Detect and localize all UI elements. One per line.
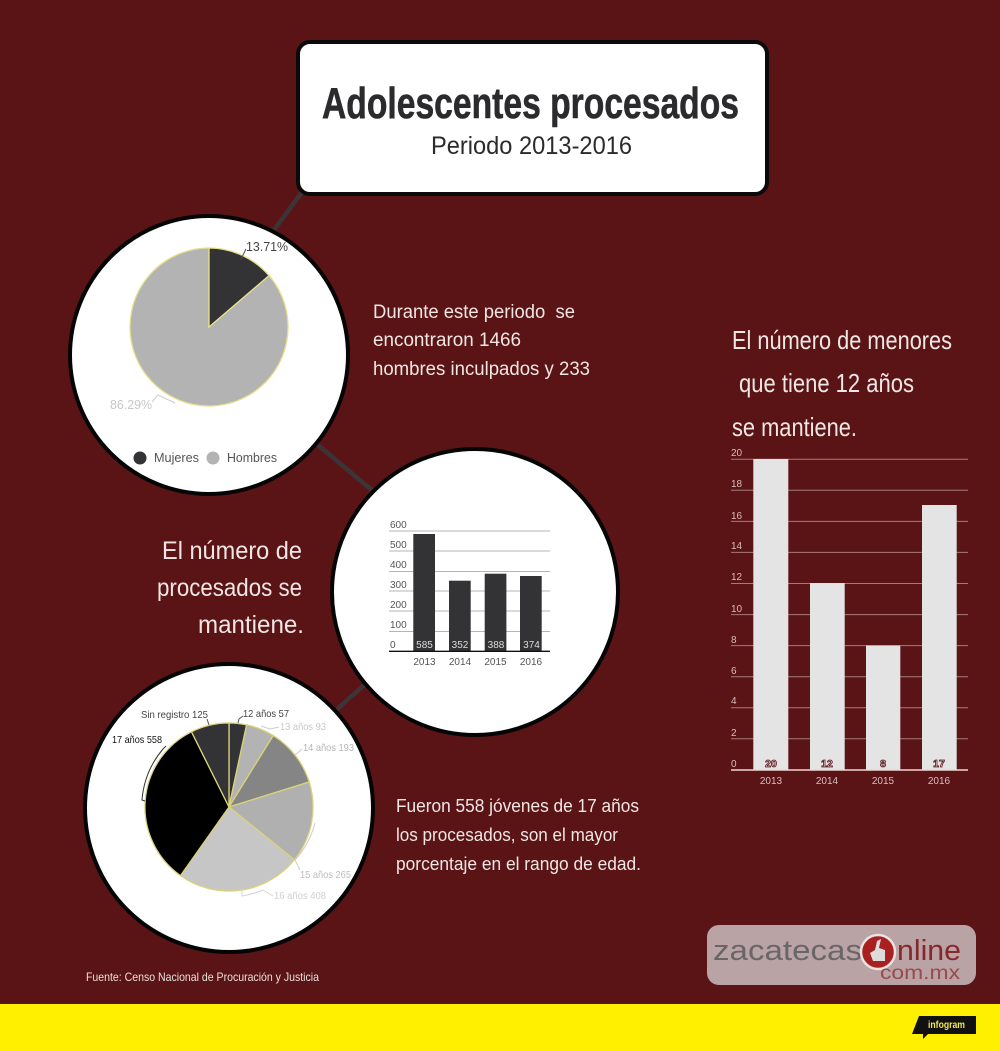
label: 16 años	[242, 889, 326, 902]
y axis labels: 400	[390, 560, 407, 571]
label: 13 años	[261, 721, 326, 733]
bars	[413, 534, 542, 651]
label: 15 años	[295, 823, 351, 881]
legend	[134, 450, 277, 465]
label: 16 años: 16 años 408	[274, 890, 326, 902]
label: 14 años: 14 años 193	[303, 742, 354, 754]
label: 86.29%: 86.29%	[110, 397, 152, 412]
bar chart: 12-year-olds	[731, 448, 968, 787]
y axis labels: 200	[390, 600, 407, 611]
label: 13 años: 13 años 93	[280, 721, 326, 733]
source note: Fuente: Censo Nacional de Procuración y Justicia	[86, 970, 319, 984]
subtitle: Periodo 2013-2016	[431, 132, 632, 160]
y axis labels: 0	[390, 640, 396, 651]
y axis labels: 12	[731, 572, 743, 583]
title box	[298, 42, 767, 194]
bar values	[765, 758, 945, 770]
legend: Mujeres	[154, 450, 199, 465]
y axis labels: 100	[390, 620, 407, 631]
heading: 12-year-olds: El número de menores	[732, 325, 952, 355]
year labels: 2014	[449, 657, 472, 668]
bar values	[416, 640, 540, 651]
year labels	[413, 657, 543, 668]
y axis labels: 600	[390, 520, 407, 531]
legend: Hombres	[227, 450, 277, 465]
bar values: 388	[488, 640, 505, 651]
year labels: 2013	[413, 657, 436, 668]
x axis	[389, 650, 550, 652]
y axis labels: 14	[731, 541, 743, 552]
label: 17 años: 17 años 558	[112, 734, 162, 746]
label: 12 años: 12 años 57	[243, 708, 289, 720]
pie slice: hombres	[130, 248, 288, 406]
y axis labels: 4	[731, 696, 737, 707]
logo: zacatecas online	[707, 925, 976, 985]
text block: processed stays the same: mantiene.	[198, 611, 304, 639]
year labels: 2015	[872, 776, 895, 787]
footer band	[0, 1004, 1000, 1051]
y axis labels: 8	[731, 635, 737, 646]
year labels: 2013	[760, 776, 783, 787]
text block: gender summary: Durante este periodo se	[373, 302, 575, 323]
y axis labels	[731, 448, 743, 770]
panel: processed per year circle	[332, 449, 618, 735]
text block: gender summary: encontraron 1466	[373, 330, 521, 351]
text block: age summary	[396, 796, 641, 874]
text block: age summary: porcentaje en el rango de edad.	[396, 854, 641, 874]
bars	[753, 459, 957, 770]
y axis labels: 2	[731, 728, 737, 739]
connector lines between circles	[274, 192, 374, 712]
pie chart by age	[145, 723, 313, 891]
panel: gender pie circle	[70, 216, 348, 494]
logo: zacatecas online: zacatecas	[713, 935, 862, 967]
icon: red circle with hand	[861, 935, 895, 969]
y axis labels: 500	[390, 540, 407, 551]
label: 13.71%: 13.71%	[246, 239, 288, 254]
text block: gender summary	[373, 302, 590, 380]
grid lines	[731, 459, 968, 739]
year labels: 2014	[816, 776, 839, 787]
text block: processed stays the same: El número de	[162, 537, 302, 565]
panel: age pie circle	[85, 664, 373, 952]
heading: 12-year-olds	[732, 325, 952, 442]
y axis labels: 6	[731, 666, 737, 677]
text block: gender summary: hombres inculpados y 233	[373, 359, 590, 380]
logo: zacatecas online: nline	[897, 935, 961, 967]
y axis labels: 300	[390, 580, 407, 591]
label: 13.71%	[241, 239, 288, 259]
text block: age summary: los procesados, son el mayor	[396, 825, 618, 845]
y axis labels: 16	[731, 511, 743, 522]
bar values: 585	[416, 640, 433, 651]
year labels	[760, 776, 951, 787]
label: 17 años	[112, 734, 166, 801]
bar values: 17	[933, 758, 945, 770]
text block: processed stays the same: procesados se	[157, 574, 302, 602]
label: 86.29%	[110, 395, 175, 412]
grid lines	[389, 531, 550, 632]
year labels: 2015	[484, 657, 507, 668]
y axis labels: 20	[731, 448, 743, 459]
title: Adolescentes procesados	[322, 79, 739, 128]
label: 12 años	[238, 708, 289, 723]
bar values: 12	[821, 758, 833, 770]
text block: age summary: Fueron 558 jóvenes de 17 años	[396, 796, 639, 816]
pie slice: mujeres	[209, 248, 269, 327]
year labels: 2016	[520, 657, 543, 668]
label: 15 años: 15 años 265	[300, 869, 351, 881]
bar values: 374	[523, 640, 540, 651]
bar values: 8	[880, 758, 886, 770]
label: Sin registro: Sin registro 125	[141, 709, 208, 721]
heading: 12-year-olds: que tiene 12 años	[739, 368, 914, 398]
x axis	[731, 769, 968, 771]
y axis labels: 18	[731, 479, 743, 490]
y axis labels	[390, 520, 407, 651]
year labels: 2016	[928, 776, 951, 787]
y axis labels: 10	[731, 604, 743, 615]
bar values: 20	[765, 758, 777, 770]
y axis labels: 0	[731, 759, 737, 770]
infogram badge: infogram	[928, 1020, 965, 1031]
infogram badge	[912, 1016, 976, 1039]
bar values: 352	[452, 640, 469, 651]
text block: processed stays the same	[157, 537, 304, 639]
heading: 12-year-olds: se mantiene.	[732, 412, 857, 442]
logo: zacatecas online: com.mx	[880, 963, 961, 984]
